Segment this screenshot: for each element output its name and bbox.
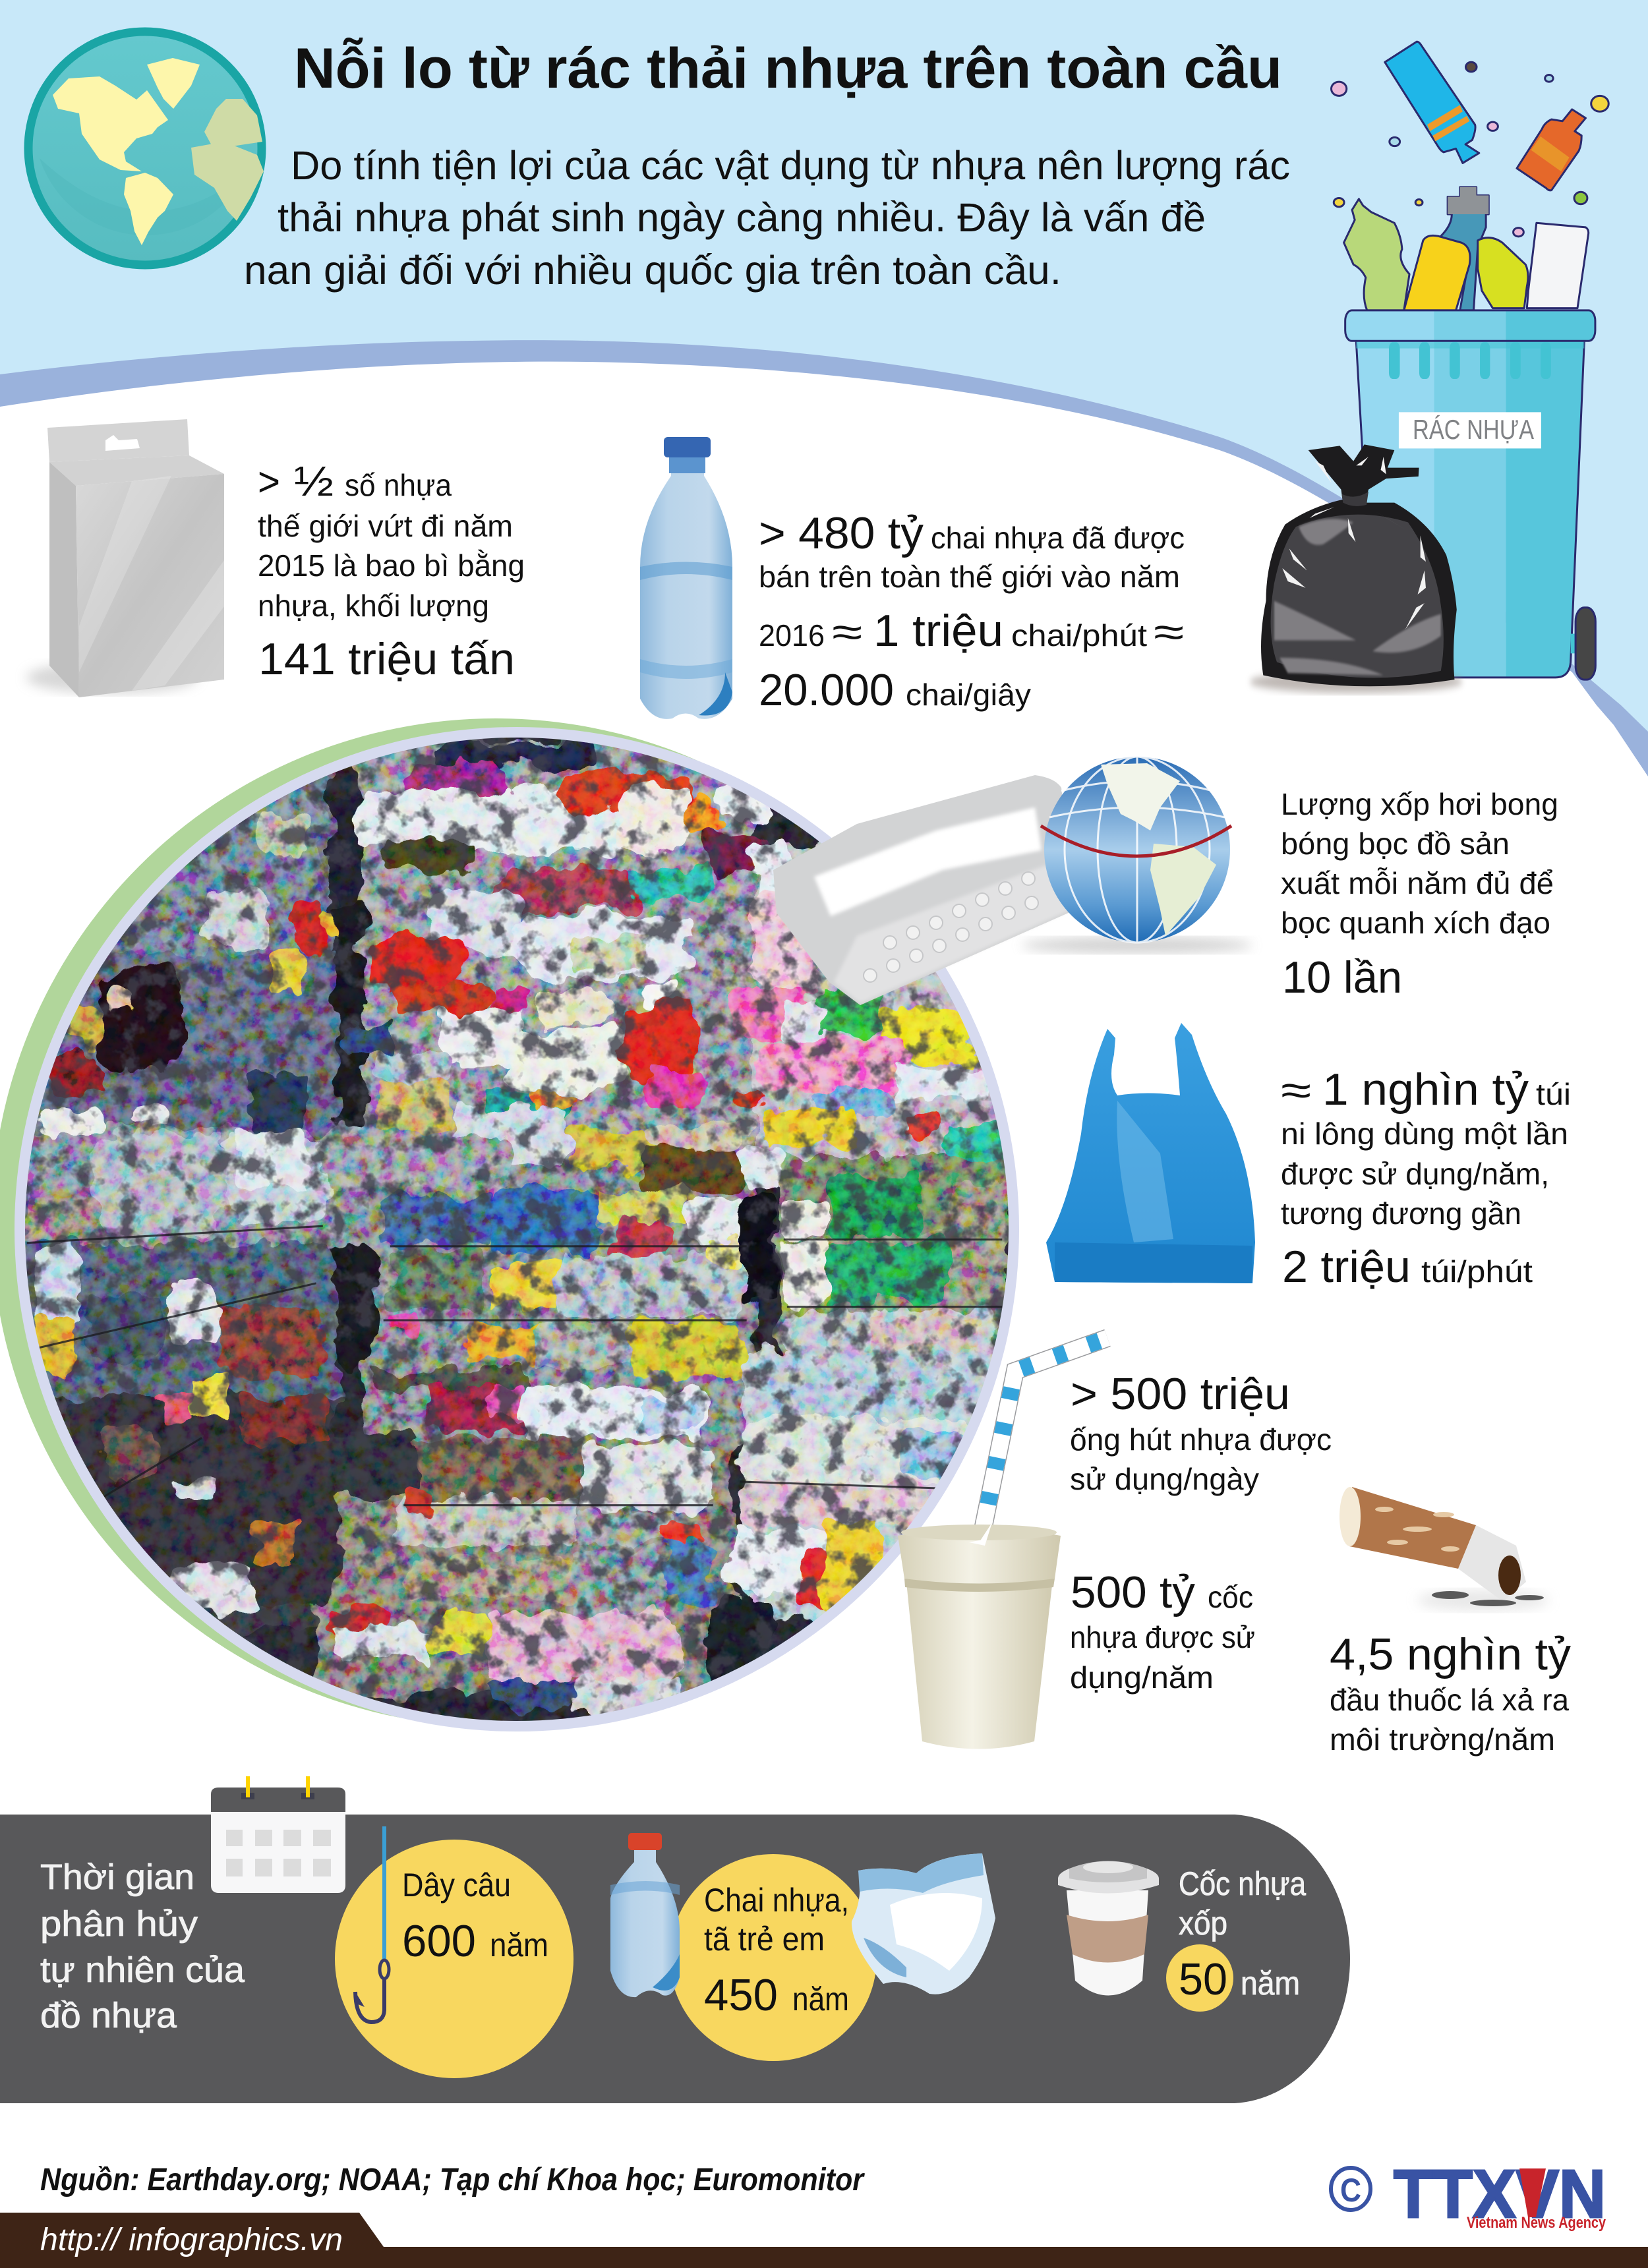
- stat text: cups: 500 tỷ: [1071, 1567, 1195, 1617]
- icon: fishing hook: [355, 1826, 389, 2022]
- intro text block: [244, 143, 1290, 293]
- panel heading: [40, 1857, 245, 2035]
- bag knot: [1341, 492, 1368, 506]
- title: Nỗi lo từ rác thải nhựa trên toàn cầu: [294, 37, 1282, 100]
- stat text: bubble wrap: 10 lần: [1282, 952, 1402, 1003]
- stat text: 480 billion bottles: 2016: [759, 618, 825, 653]
- text: bottle and diaper 450 years: tã trẻ em: [704, 1921, 825, 1958]
- bin body mid: [1434, 341, 1506, 678]
- icon: bubble wrap roll: [773, 775, 1076, 1005]
- stat text: cups: nhựa được sử: [1070, 1620, 1255, 1654]
- text: foam cup 50 years: 50: [1179, 1954, 1227, 2004]
- intro text block: thải nhựa phát sinh ngày càng nhiều. Đây là vấn đề: [278, 195, 1206, 240]
- stat text: bubble wrap: Lượng xốp hơi bong: [1281, 787, 1558, 821]
- icon: small bottle: [610, 1833, 680, 1997]
- stat text: half of plastic: 141 triệu tấn: [258, 634, 515, 684]
- white carton: [1527, 223, 1589, 308]
- icon: water bottle: [640, 437, 732, 719]
- footer band: [0, 2213, 1648, 2268]
- stat text: 480 billion bottles: ≈: [1154, 610, 1184, 655]
- source line: Nguồn: Earthday.org; NOAA; Tạp chí Khoa học; Euromonitor: [40, 2163, 865, 2197]
- flying blue bottle: [1385, 42, 1479, 163]
- icon: calendar: [211, 1776, 345, 1893]
- stat text: 480 billion bottles: chai nhựa đã được: [931, 521, 1185, 555]
- garbage bag shadow: [1250, 670, 1463, 693]
- bin lid shade: [1356, 341, 1584, 349]
- flying orange bottle: [1517, 109, 1585, 190]
- copyright logo: [1331, 2168, 1370, 2210]
- stat text: bubble wrap: xuất mỗi năm đủ để: [1281, 866, 1554, 900]
- icon: plastic bin with bottles and garbage bag: [1250, 42, 1608, 693]
- stat text: straws: [1070, 1369, 1332, 1496]
- bin ribs: [1389, 342, 1551, 379]
- lime bottle: [1478, 238, 1528, 308]
- panel: decomposition time: [0, 1815, 1350, 2103]
- text: foam cup 50 years: [1179, 1865, 1306, 2004]
- icon: takeaway cup: [1058, 1861, 1159, 1996]
- wheel: [1571, 608, 1595, 680]
- stat text: bubble wrap: bọc quanh xích đạo: [1281, 906, 1550, 940]
- header light blue area: [0, 0, 1648, 778]
- panel heading: phân hủy: [40, 1904, 198, 1944]
- stat text: straws: > 500 triệu: [1071, 1369, 1290, 1419]
- bin body right: [1506, 341, 1584, 678]
- stat text: straws: sử dụng/ngày: [1070, 1462, 1259, 1496]
- stat text: plastic bags: ≈: [1281, 1066, 1311, 1114]
- text: bottle and diaper 450 years: Chai nhựa,: [704, 1882, 849, 1919]
- stat text: half of plastic: 2015 là bao bì bằng: [258, 548, 525, 583]
- label text: RÁC NHỰA: RÁC NHỰA: [1413, 414, 1534, 445]
- text: fishing line 600 years: Dây câu: [402, 1867, 511, 1904]
- flask cap: [1448, 187, 1488, 214]
- stat text: half of plastic: nhựa, khối lượng: [258, 589, 489, 623]
- icon: foam cup: [898, 1523, 1061, 1749]
- stat text: cups: dụng/năm: [1070, 1660, 1214, 1695]
- bag highlights: [1282, 457, 1426, 629]
- stat text: half of plastic: số nhựa: [345, 468, 452, 502]
- flying dots: [1332, 62, 1608, 237]
- stat text: straws: ống hút nhựa được: [1070, 1422, 1332, 1457]
- yellow circle: 50: [1166, 1944, 1233, 2012]
- stat text: plastic bags: được sử dụng/năm,: [1281, 1157, 1549, 1191]
- yellow circle: fishing line: [335, 1840, 574, 2078]
- bag shade: [1274, 519, 1441, 676]
- stat text: cigarettes: đầu thuốc lá xả ra: [1330, 1683, 1569, 1717]
- stat text: half of plastic: thế giới vứt đi năm: [258, 509, 513, 543]
- text: fishing line 600 years: năm: [490, 1927, 548, 1963]
- stat text: half of plastic: >: [258, 459, 280, 505]
- icon: teal globe: [28, 32, 264, 265]
- text: bottle and diaper 450 years: 450: [704, 1970, 778, 2020]
- text: bottle and diaper 450 years: [704, 1882, 849, 2020]
- stat text: 480 billion bottles: bán trên toàn thế giới vào năm: [759, 560, 1180, 594]
- stat text: cigarettes: 4,5 nghìn tỷ: [1330, 1629, 1571, 1679]
- stat text: plastic bags: [1281, 1064, 1571, 1292]
- stat text: 480 billion bottles: chai/phút: [1011, 618, 1147, 653]
- stat text: 480 billion bottles: ≈: [832, 610, 862, 655]
- stat text: plastic bags: ni lông dùng một lần: [1281, 1117, 1568, 1151]
- stat text: 480 billion bottles: chai/giây: [906, 678, 1031, 712]
- header curved band: [0, 340, 1648, 784]
- icon: straw: [981, 1338, 1107, 1539]
- stat text: half of plastic: [258, 457, 525, 684]
- intro text block: nan giải đối với nhiều quốc gia trên toàn cầu.: [244, 248, 1061, 293]
- TTXVN logo: Vietnam News Agency: [1467, 2214, 1606, 2232]
- copyright logo: C: [1340, 2172, 1361, 2209]
- stat text: 480 billion bottles: [759, 508, 1185, 715]
- yellow bottle: [1404, 235, 1470, 310]
- stat text: half of plastic: ½: [294, 457, 334, 505]
- photo dark crevices: [0, 725, 1055, 1740]
- bin outline: [1356, 341, 1584, 678]
- stat text: plastic bags: túi/phút: [1421, 1254, 1533, 1289]
- garbage bag: [1261, 444, 1457, 686]
- icon: cigarette butt: [1339, 1487, 1549, 1611]
- text: foam cup 50 years: năm: [1241, 1965, 1300, 2002]
- photo ring: [15, 727, 1019, 1731]
- footer url: http:// infographics.vn: [40, 2223, 343, 2257]
- stat text: bubble wrap: [1281, 787, 1558, 1003]
- stat text: plastic bags: tương đương gần: [1281, 1196, 1521, 1231]
- blue flask: [1441, 187, 1488, 310]
- stat text: 480 billion bottles: 20.000: [759, 665, 894, 715]
- bin body: [1356, 341, 1434, 678]
- text: fishing line 600 years: [402, 1867, 548, 1966]
- bin label: [1399, 412, 1541, 448]
- panel heading: tự nhiên của: [40, 1950, 245, 1990]
- text: bottle and diaper 450 years: năm: [792, 1981, 849, 2018]
- stat text: cups: [1070, 1567, 1255, 1695]
- photo colour noise: [0, 725, 1055, 1740]
- flying bottle stripes: [1427, 105, 1469, 141]
- stat text: plastic bags: 1 nghìn tỷ: [1322, 1064, 1529, 1115]
- stat text: cups: cốc: [1208, 1580, 1253, 1614]
- yellow circle: bottle and diaper: [670, 1854, 877, 2061]
- stat text: plastic bags: 2 triệu: [1282, 1242, 1411, 1292]
- stat text: plastic bags: túi: [1536, 1077, 1571, 1111]
- text: fishing line 600 years: 600: [402, 1916, 476, 1966]
- stat text: cigarettes: môi trường/năm: [1330, 1722, 1555, 1757]
- icon: diaper: [852, 1853, 995, 1994]
- bag inner fold: [1271, 515, 1444, 678]
- bale straps: [27, 1226, 1002, 1519]
- photo: compressed plastic waste bales: [0, 725, 1055, 1740]
- TTXVN logo: TTXVN: [1394, 2156, 1606, 2232]
- green bottle: [1344, 199, 1409, 310]
- text: foam cup 50 years: Cốc nhựa: [1179, 1865, 1306, 1902]
- orange bottle stripe: [1531, 136, 1570, 171]
- stat text: 480 billion bottles: 1 triệu: [873, 606, 1003, 656]
- icon: globe with equator: [1022, 757, 1252, 953]
- icon: blue plastic bag: [1046, 1023, 1255, 1283]
- stat text: cigarettes: [1330, 1629, 1571, 1757]
- stat text: 480 billion bottles: > 480 tỷ: [759, 508, 924, 558]
- stat text: bubble wrap: bóng bọc đồ sản: [1281, 827, 1510, 861]
- icon: plastic box packaging: [26, 419, 224, 697]
- bin lid: [1345, 310, 1595, 341]
- panel heading: đồ nhựa: [40, 1996, 177, 2035]
- green crescent behind photo: [0, 718, 1000, 1727]
- text: foam cup 50 years: xốp: [1179, 1905, 1227, 1942]
- panel heading: Thời gian: [40, 1857, 194, 1897]
- intro text block: Do tính tiện lợi của các vật dụng từ nhựa nên lượng rác: [291, 143, 1290, 188]
